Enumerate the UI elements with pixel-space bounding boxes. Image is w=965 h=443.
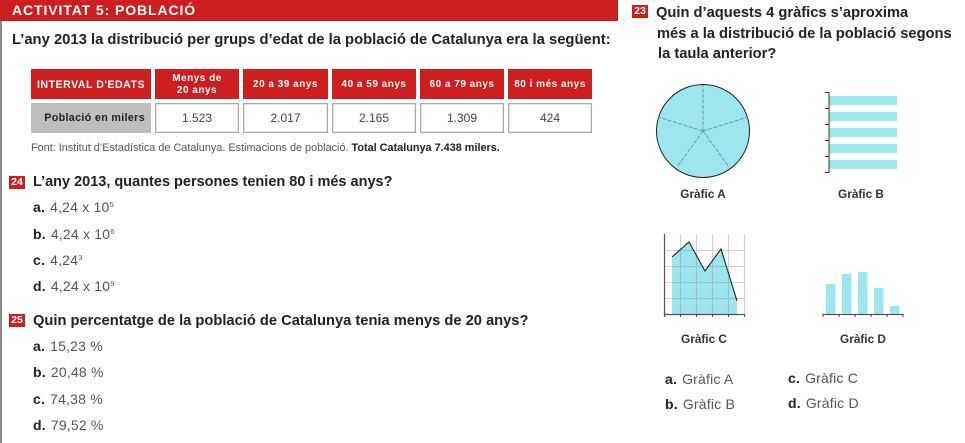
value: 1.523: 1.523 [182, 111, 212, 125]
table header: 20 to 39 [243, 69, 328, 99]
data table [31, 69, 592, 133]
value: 1.309 [420, 103, 504, 133]
title banner: ACTIVITAT 5: POBLACIÓ [12, 2, 196, 18]
badge 23 [632, 5, 648, 18]
option 24d: d. 4,24 x 109 [33, 278, 115, 294]
chart B: horizontal bars [825, 92, 897, 173]
value: 424: 424 [540, 111, 560, 125]
title banner [0, 0, 618, 21]
source note: Font: Institut d’Estadística de Catalunya. Estimacions de població. Total Catalunya 7.438 milers. [31, 142, 500, 154]
chart C: area chart [664, 234, 746, 317]
question 23: més a la distribució de la població segons [657, 26, 952, 42]
table header: interval [31, 69, 151, 99]
table header: under 20: 20 anys [177, 85, 217, 96]
badge 24 [9, 176, 25, 189]
value: 1.309: 1.309 [447, 111, 477, 125]
value: 2.017: 2.017 [270, 111, 301, 125]
label: chart A: Gràfic A [680, 187, 726, 201]
table header: 20 to 39: 20 a 39 anys [253, 79, 318, 90]
chart D: column chart [822, 272, 904, 317]
option 25a: a. 15,23 % [33, 338, 103, 354]
option 25b: b. 20,48 % [33, 364, 104, 380]
chart A: pie [656, 84, 750, 178]
option 24c: c. 4,243 [33, 252, 83, 268]
table header: interval: INTERVAL D'EDATS [37, 79, 145, 91]
label: chart C: Gràfic C [681, 332, 727, 346]
left border line [0, 21, 2, 443]
table header: under 20: Menys de [172, 73, 222, 84]
value: 424 [508, 103, 592, 133]
label: chart D: Gràfic D [840, 332, 886, 346]
badge 24: 24 [11, 176, 23, 188]
question 25: Quin percentatge de la població de Catalunya tenia menys de 20 anys? [33, 313, 528, 329]
table header: 40 to 59: 40 a 59 anys [342, 79, 406, 90]
label: chart B: Gràfic B [838, 187, 884, 201]
badge 25 [9, 314, 25, 327]
option 24a: a. 4,24 x 105 [33, 199, 114, 215]
option 24b: b. 4,24 x 106 [33, 226, 115, 242]
row label: Població en milers [44, 112, 145, 124]
table header: 80 and over [508, 69, 592, 99]
table header: 80 and over: 80 i més anys [514, 79, 586, 90]
value: 2.165 [332, 103, 416, 133]
question 23: la taula anterior? [658, 46, 776, 62]
value: 1.523 [155, 103, 239, 133]
badge 23: 23 [634, 5, 646, 17]
table header: under 20 [155, 69, 239, 99]
option 23a: a. Gràfic A [665, 371, 733, 387]
intro text: L’any 2013 la distribució per grups d’edat de la població de Catalunya era la següent: [12, 32, 611, 48]
value: 2.165: 2.165 [359, 111, 389, 125]
option 25d: d. 79,52 % [33, 417, 104, 433]
table header: 40 to 59 [332, 69, 416, 99]
table header: 60 to 79: 60 a 79 anys [430, 79, 494, 90]
row label [31, 103, 151, 133]
option 25c: c. 74,38 % [33, 391, 103, 407]
question 23: Quin d’aquests 4 gràfics s’aproxima [656, 5, 908, 21]
option 23c: c. Gràfic C [788, 370, 858, 386]
question 23 [656, 5, 952, 62]
option 23d: d. Gràfic D [788, 395, 859, 411]
value: 2.017 [243, 103, 328, 133]
badge 25: 25 [11, 314, 23, 326]
table header: 60 to 79 [420, 69, 504, 99]
option 23b: b. Gràfic B [665, 396, 735, 412]
question 24: L’any 2013, quantes persones tenien 80 i més anys? [33, 174, 392, 190]
